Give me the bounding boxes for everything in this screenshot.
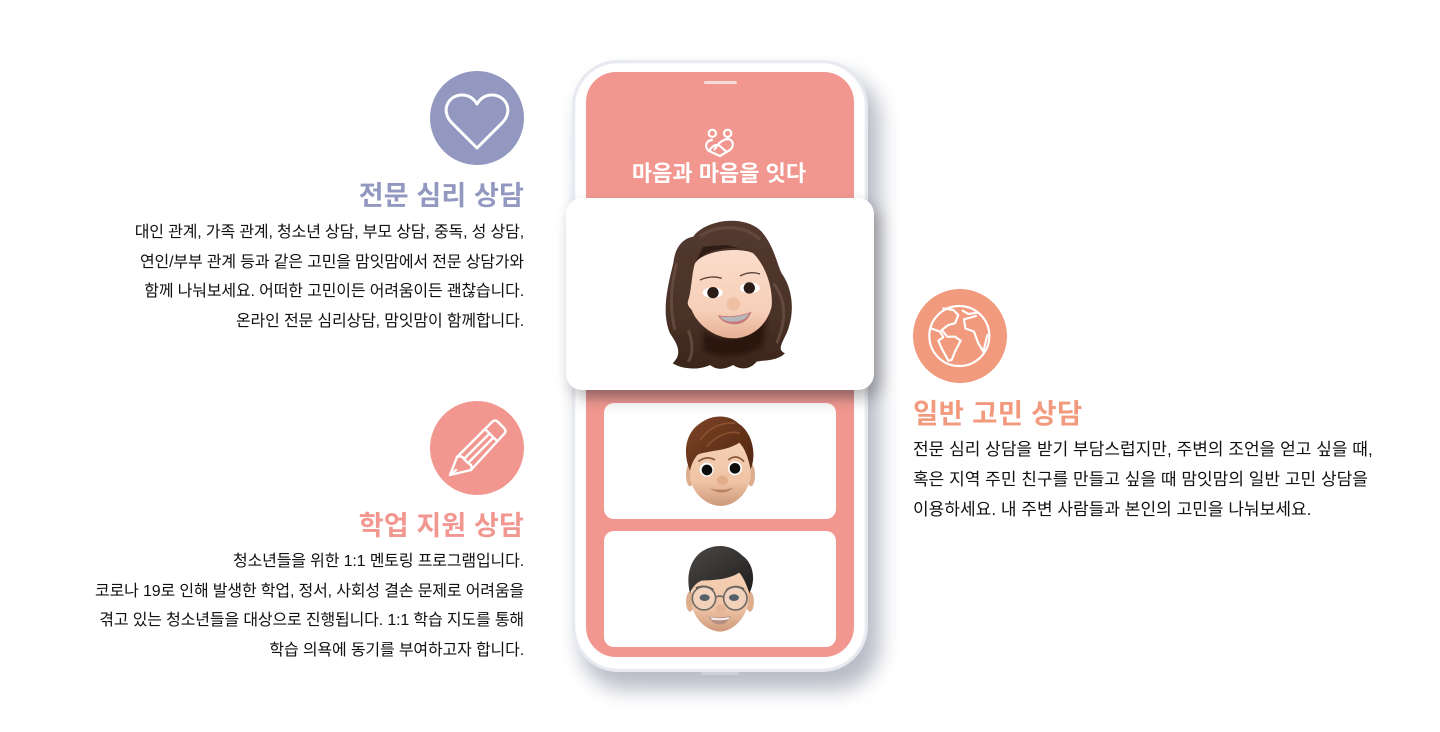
heading: 학업 지원 상담: 학업 지원 상담 xyxy=(359,511,524,541)
side buttons xyxy=(569,136,572,206)
text block: 일반 고민 상담 description: 전문 심리 상담을 받기 부담스럽지만, 주변의 조언을 얻고 싶을 때, xyxy=(913,440,1373,459)
heading: 일반 고민 상담: 일반 고민 상담 xyxy=(913,398,1082,429)
text block: 학업 지원 상담 description: 청소년들을 위한 1:1 멘토링 프로그램입니다. xyxy=(233,553,524,570)
text block: 학업 지원 상담 description: 겪고 있는 청소년들을 대상으로 진행됩니다. 1:1 학습 지도를 통해 xyxy=(99,612,524,629)
text block: 일반 고민 상담 description: 이용하세요. 내 주변 사람들과 본인의 고민을 나눠보세요. xyxy=(913,500,1311,519)
text block: 전문 심리 상담 description: 연인/부부 관계 등과 같은 고민을 맘잇맘에서 전문 상담가와 xyxy=(140,254,524,270)
text block: 일반 고민 상담 description xyxy=(913,440,1373,519)
card: boy memoji xyxy=(604,403,836,519)
icon: pencil xyxy=(430,401,524,495)
text block: 전문 심리 상담 description: 함께 나눠보세요. 어떠한 고민이든 어려움이든 괜찮습니다. xyxy=(144,283,524,300)
text block: 전문 심리 상담 description: 온라인 전문 심리상담, 맘잇맘이 함께합니다. xyxy=(236,312,524,330)
text block: 학업 지원 상담 description: 코로나 19로 인해 발생한 학업, 정서, 사회성 결손 문제로 어려움을 xyxy=(95,582,524,600)
screen title: 마음과 마음을 잇다 xyxy=(632,161,806,186)
phone mockup xyxy=(568,60,892,702)
heading: 전문 심리 상담: 전문 심리 상담 xyxy=(359,181,524,211)
card: glasses memoji xyxy=(604,531,836,647)
icon: linked hearts logo xyxy=(706,130,733,156)
phone screen xyxy=(586,72,854,657)
icon: globe xyxy=(913,289,1007,383)
icon: heart xyxy=(430,71,524,165)
shadow under big card xyxy=(586,390,854,403)
text block: 전문 심리 상담 description: 대인 관계, 가족 관계, 청소년 상담, 부모 상담, 중독, 성 상담, xyxy=(135,224,524,241)
text block: 학업 지원 상담 description xyxy=(95,552,524,658)
text block: 전문 심리 상담 description xyxy=(135,224,524,330)
text block: 일반 고민 상담 description: 혹은 지역 주민 친구를 만들고 싶을 때 맘잇맘의 일반 고민 상담을 xyxy=(913,470,1368,489)
card: woman memoji xyxy=(562,196,890,408)
text block: 학업 지원 상담 description: 학습 의욕에 동기를 부여하고자 합니다. xyxy=(269,642,524,658)
